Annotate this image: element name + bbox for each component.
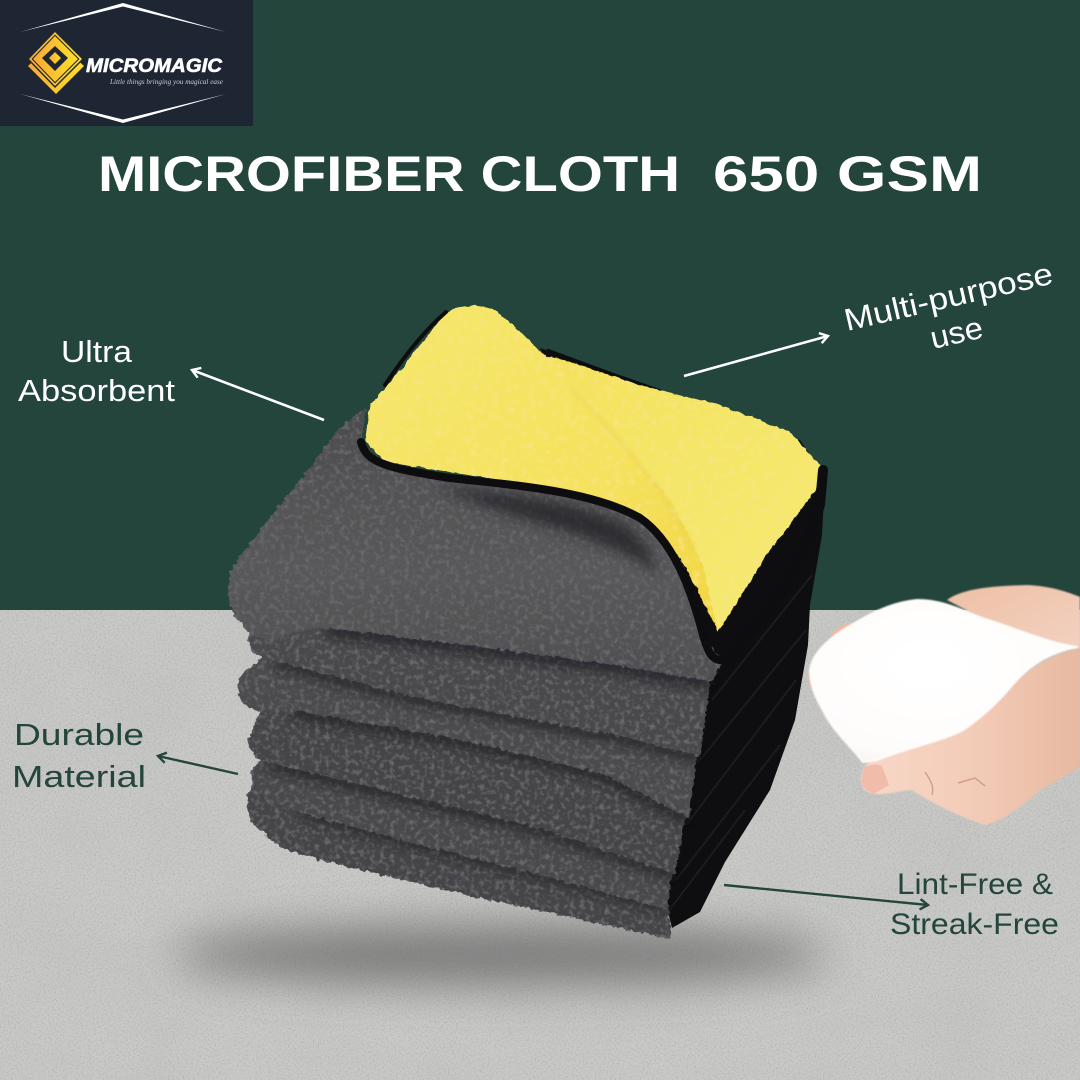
callout: multi-purpose use xyxy=(684,256,1056,376)
black edge fold lines xyxy=(668,575,812,912)
label: ultra absorbent: Ultra xyxy=(61,334,133,369)
label: durable material xyxy=(12,717,146,794)
crease 5/6 xyxy=(300,812,667,908)
towel layer 5 xyxy=(252,740,675,910)
left fingertip xyxy=(808,670,818,692)
label: ultra absorbent xyxy=(18,334,175,408)
label: lint-free and streak-free: Lint-Free & xyxy=(897,868,1053,901)
crease 3/4 xyxy=(291,712,689,820)
label: lint-free and streak-free xyxy=(890,868,1059,941)
logo diamond icon xyxy=(27,30,84,94)
thumb nail xyxy=(861,765,889,794)
lower palm and thumb xyxy=(861,648,1080,825)
towel stack black edge side xyxy=(540,348,825,928)
dark shadow under flap xyxy=(440,486,660,575)
label: multi-purpose use: use xyxy=(927,310,986,356)
thumb crease xyxy=(925,772,985,795)
logo hexagon lines xyxy=(20,3,226,123)
black binding edges xyxy=(361,312,823,660)
foam xyxy=(810,600,1077,762)
towel layer 6 xyxy=(247,760,671,939)
arrow: ultra absorbent xyxy=(192,370,324,420)
towel stack xyxy=(227,306,825,939)
title: 650 GSM xyxy=(713,146,982,202)
logo tagline: Little things bringing you magical ease xyxy=(109,78,223,86)
label: durable material: Durable xyxy=(14,717,144,752)
label: durable material: Material xyxy=(12,759,146,794)
background: concrete floor xyxy=(0,610,1080,1080)
floor shadow under towels xyxy=(170,925,830,985)
logo wordmark: MICROMAGIC xyxy=(86,56,222,77)
callout: lint-free and streak-free xyxy=(724,868,1059,941)
hand holding white foam xyxy=(808,585,1080,825)
title: MICROFIBER CLOTH xyxy=(98,146,680,202)
towel layer 2 xyxy=(249,605,712,756)
flap fold shadow xyxy=(570,388,695,550)
yellow back panel xyxy=(538,356,820,632)
crease 1/2 xyxy=(327,630,712,684)
towel layer 3 xyxy=(238,650,700,818)
callout: ultra absorbent xyxy=(18,334,324,420)
yellow front flap xyxy=(365,306,718,632)
callout: durable material xyxy=(12,717,238,794)
title xyxy=(98,146,982,202)
arrow: multi-purpose xyxy=(684,336,828,376)
label: multi-purpose use: Multi-purpose xyxy=(841,256,1056,338)
back hand xyxy=(947,585,1080,650)
crease 4/5 xyxy=(267,764,675,876)
label: ultra absorbent: Absorbent xyxy=(18,373,175,408)
label: multi-purpose use xyxy=(841,256,1056,356)
towel top fold grey xyxy=(227,408,722,682)
arrow: lint-free xyxy=(724,885,928,905)
background: dark green wall xyxy=(0,0,1080,610)
crease 2/3 xyxy=(275,663,700,758)
arrow: durable material xyxy=(158,756,238,774)
label: lint-free and streak-free: Streak-Free xyxy=(890,908,1059,941)
back finger xyxy=(831,623,866,640)
towel layer 4 xyxy=(248,690,689,874)
logo panel xyxy=(0,0,253,126)
